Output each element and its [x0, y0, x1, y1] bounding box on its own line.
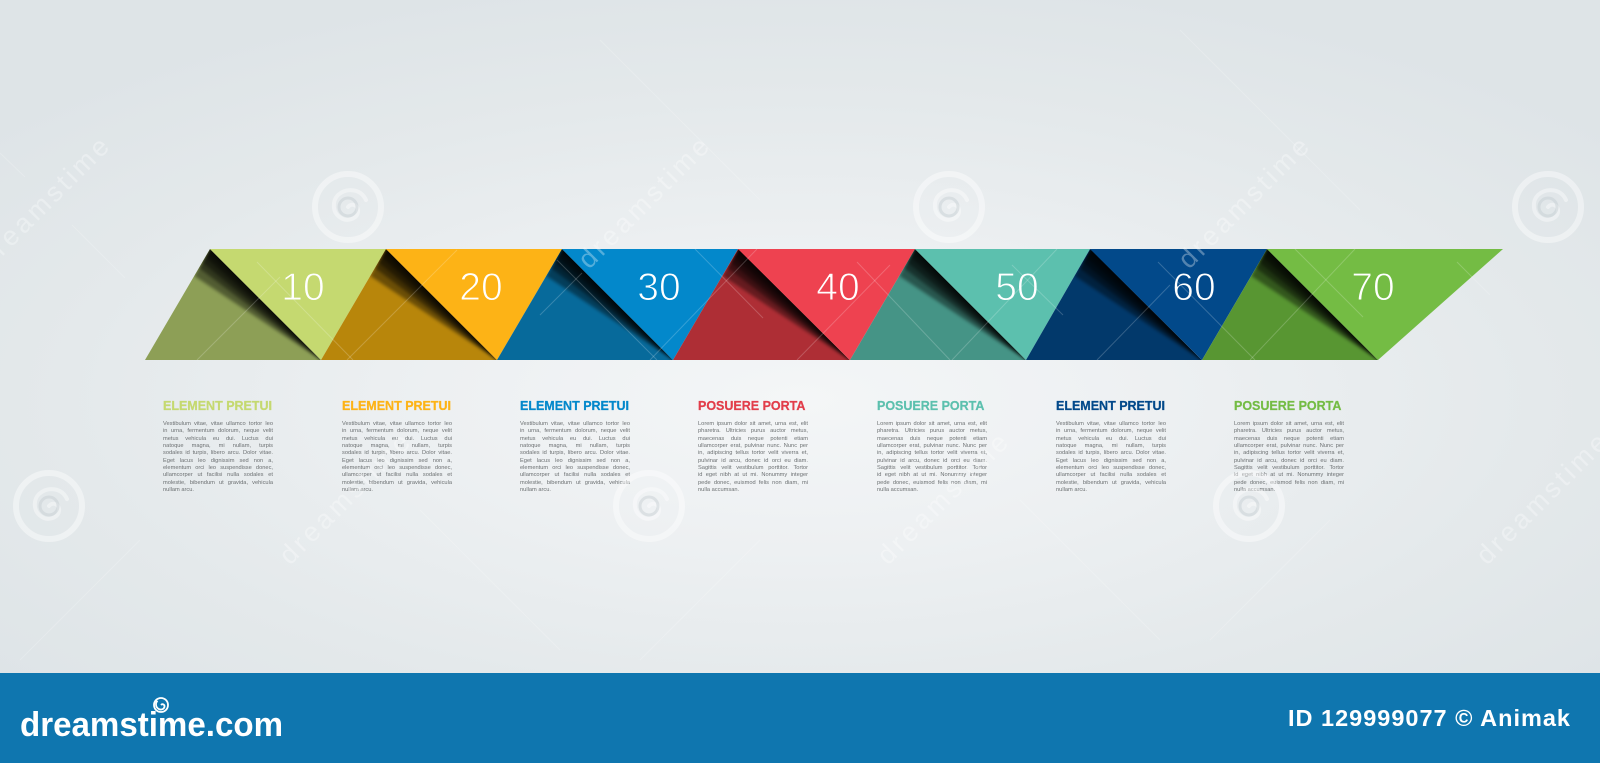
text column 1: ELEMENT PRETUI: [163, 399, 272, 413]
text column 4: [698, 399, 808, 493]
text column 7: ullamcorper erat, pulvinar nunc. Nunc per: [1234, 443, 1344, 449]
text column 3: molestie, bibendum ut gravida, vehicula: [520, 480, 630, 486]
text column 6: [1056, 399, 1166, 493]
dreamstime watermark text: dreamstime: [1172, 131, 1315, 274]
dreamstime watermark text: dreamstime: [572, 131, 715, 274]
text column 7: in, adipiscing tellus tortor velit viverra et,: [1234, 450, 1344, 456]
text column 2: metus vehicula eu dui. Luctus dui: [342, 436, 452, 442]
text column 6: in urna, fermentum dolorum, neque velit: [1056, 428, 1166, 434]
step 40: [673, 244, 915, 362]
spiral marks: [16, 174, 1581, 539]
step 70: [1202, 244, 1503, 362]
text column 1: metus vehicula eu dui. Luctus dui: [163, 436, 273, 442]
text column 5: id eget nibh at ut mi. Nonummy integer: [877, 472, 987, 478]
text column 3: ELEMENT PRETUI: [520, 399, 629, 413]
text column 3: metus vehicula eu dui. Luctus dui: [520, 436, 630, 442]
text column 5: POSUERE PORTA: [877, 399, 984, 413]
text column 7: POSUERE PORTA: [1234, 399, 1341, 413]
step 20: 20: [459, 266, 503, 309]
text column 2: ELEMENT PRETUI: [342, 399, 451, 413]
text column 6: Vestibulum vitae, vitae ullamco tortor leo: [1056, 421, 1166, 427]
text column 1: ullamcorper ut facilisi nulla sodales et: [163, 472, 273, 478]
text column 5: maecenas duis neque potenti etiam: [877, 436, 987, 442]
step 60: 60: [1172, 266, 1216, 309]
text column 4: Sagittis velit vestibulum porttitor. Tortor: [698, 465, 808, 471]
image id credit: ID 129999077 © Animak: [1288, 705, 1571, 731]
text column 6: elementum orci leo suspendisse donec,: [1056, 465, 1166, 471]
text column 5: [877, 399, 987, 493]
text column 4: id eget nibh at ut mi. Nonummy integer: [698, 472, 808, 478]
step 70: 70: [1351, 266, 1395, 309]
text column 5: Sagittis velit vestibulum porttitor. Tortor: [877, 465, 987, 471]
step 10: [145, 244, 386, 362]
text column 2: sodales id turpis, libero arcu. Dolor vitae.: [342, 450, 452, 456]
text column 6: ullamcorper ut facilisi nulla sodales et: [1056, 472, 1166, 478]
step 30: [497, 244, 738, 362]
text column 2: in urna, fermentum dolorum, neque velit: [342, 428, 452, 434]
text column 2: ullamcorper ut facilisi nulla sodales et: [342, 472, 452, 478]
text column 5: pulvinar id arcu, donec id orci eu diam.: [877, 458, 987, 464]
text column 3: nullam arcu.: [520, 487, 551, 493]
text column 4: Lorem ipsum dolor sit amet, urna est, elit: [698, 421, 808, 427]
text column 6: ELEMENT PRETUI: [1056, 399, 1165, 413]
text column 7: nulla accumsan.: [1234, 487, 1275, 493]
text column 1: molestie, bibendum ut gravida, vehicula: [163, 480, 273, 486]
text column 2: elementum orci leo suspendisse donec,: [342, 465, 452, 471]
text column 7: id eget nibh at ut mi. Nonummy integer: [1234, 472, 1344, 478]
text column 1: in urna, fermentum dolorum, neque velit: [163, 428, 273, 434]
text column 2: molestie, bibendum ut gravida, vehicula: [342, 480, 452, 486]
text column 5: pharetra. Ultricies purus auctor metus,: [877, 428, 987, 434]
text column 5: in, adipiscing tellus tortor velit viverra et,: [877, 450, 987, 456]
text column 7: [1234, 399, 1344, 493]
text column 1: natoque magna, mi nullam, turpis: [163, 443, 273, 449]
step 60: [1026, 244, 1267, 362]
text column 1: sodales id turpis, libero arcu. Dolor vitae.: [163, 450, 273, 456]
text column 7: pulvinar id arcu, donec id orci eu diam.: [1234, 458, 1344, 464]
dreamstime watermark text: dreamstime: [273, 427, 416, 570]
step 10: 10: [281, 266, 325, 309]
text column 4: POSUERE PORTA: [698, 399, 805, 413]
text column 6: natoque magna, mi nullam, turpis: [1056, 443, 1166, 449]
step 50: 50: [995, 266, 1039, 309]
text column 3: natoque magna, mi nullam, turpis: [520, 443, 630, 449]
text column 6: Eget lacus leo dignissim sed non a,: [1056, 458, 1166, 464]
step 30: 30: [637, 266, 681, 309]
text column 4: pharetra. Ultricies purus auctor metus,: [698, 428, 808, 434]
text column 5: Lorem ipsum dolor sit amet, urna est, elit: [877, 421, 987, 427]
text column 6: metus vehicula eu dui. Luctus dui: [1056, 436, 1166, 442]
text column 5: pede donec, euismod felis non diam, mi: [877, 480, 987, 486]
text column 7: maecenas duis neque potenti etiam: [1234, 436, 1344, 442]
dreamstime watermark text: dreamstime: [871, 427, 1014, 570]
text column 7: pharetra. Ultricies purus auctor metus,: [1234, 428, 1344, 434]
text column 7: Sagittis velit vestibulum porttitor. Tortor: [1234, 465, 1344, 471]
step 50: [850, 244, 1090, 362]
text column 3: ullamcorper ut facilisi nulla sodales et: [520, 472, 630, 478]
text column 2: Eget lacus leo dignissim sed non a,: [342, 458, 452, 464]
text column 1: Vestibulum vitae, vitae ullamco tortor leo: [163, 421, 273, 427]
text column 5: ullamcorper erat, pulvinar nunc. Nunc per: [877, 443, 987, 449]
text column 4: nulla accumsan.: [698, 487, 739, 493]
footer bar: [0, 673, 1600, 763]
text column 3: sodales id turpis, libero arcu. Dolor vitae.: [520, 450, 630, 456]
text column 6: sodales id turpis, libero arcu. Dolor vitae.: [1056, 450, 1166, 456]
timeline ribbon: [145, 249, 1503, 360]
text column 1: Eget lacus leo dignissim sed non a,: [163, 458, 273, 464]
text column 4: pede donec, euismod felis non diam, mi: [698, 480, 808, 486]
text column 1: nullam arcu.: [163, 487, 194, 493]
text column 2: nullam arcu.: [342, 487, 373, 493]
text column 4: pulvinar id arcu, donec id orci eu diam.: [698, 458, 808, 464]
text column 2: natoque magna, mi nullam, turpis: [342, 443, 452, 449]
text column 4: in, adipiscing tellus tortor velit viverra et,: [698, 450, 808, 456]
text column 6: molestie, bibendum ut gravida, vehicula: [1056, 480, 1166, 486]
text column 4: ullamcorper erat, pulvinar nunc. Nunc per: [698, 443, 808, 449]
dreamstime watermark text: [0, 131, 1600, 570]
text column 3: in urna, fermentum dolorum, neque velit: [520, 428, 630, 434]
text column 5: nulla accumsan.: [877, 487, 918, 493]
text column 1: elementum orci leo suspendisse donec,: [163, 465, 273, 471]
step 40: 40: [816, 266, 860, 309]
text column 4: maecenas duis neque potenti etiam: [698, 436, 808, 442]
text column 3: Eget lacus leo dignissim sed non a,: [520, 458, 630, 464]
lattice lines: [0, 30, 1490, 660]
step 20: [321, 244, 562, 362]
text column 3: elementum orci leo suspendisse donec,: [520, 465, 630, 471]
text column 1: [163, 399, 273, 493]
text column 6: nullam arcu.: [1056, 487, 1087, 493]
text column 7: pede donec, euismod felis non diam, mi: [1234, 480, 1344, 486]
text column 3: Vestibulum vitae, vitae ullamco tortor leo: [520, 421, 630, 427]
dreamstime logo: dreamstime.com: [20, 706, 283, 744]
text column 2: Vestibulum vitae, vitae ullamco tortor leo: [342, 421, 452, 427]
text column 2: [342, 399, 452, 493]
text column 3: [520, 399, 630, 493]
text column 7: Lorem ipsum dolor sit amet, urna est, elit: [1234, 421, 1344, 427]
